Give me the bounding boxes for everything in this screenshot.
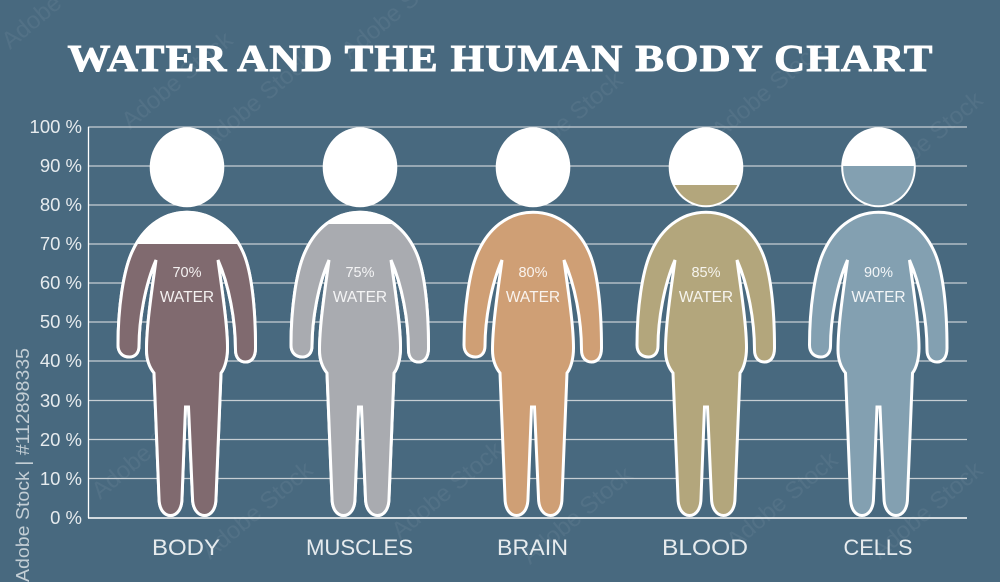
x-axis labels: MUSCLES xyxy=(306,535,413,560)
y-axis labels: 0 % xyxy=(50,507,82,528)
watermarks: Adobe Stock xyxy=(507,66,629,175)
side credit text: Adobe Stock | #112898335 xyxy=(13,348,33,582)
x-axis labels: CELLS xyxy=(844,535,912,560)
figure: body 70%: WATER xyxy=(160,289,214,306)
figure: brain 80%: WATER xyxy=(506,289,560,306)
watermarks: Adobe Stock xyxy=(867,86,989,195)
figure: muscles 75%: 75% xyxy=(345,265,375,281)
figure: blood 85%: WATER xyxy=(679,289,733,306)
figure: blood 85% xyxy=(637,127,774,516)
figure: body 70% xyxy=(118,127,256,516)
y-axis labels: 50 % xyxy=(40,311,82,332)
y-axis labels: 70 % xyxy=(40,233,82,254)
figure: body 70%: 70% xyxy=(172,265,202,281)
watermarks: Adobe Stock xyxy=(517,461,639,570)
x-axis labels: BRAIN xyxy=(497,535,568,560)
y-axis labels: 90 % xyxy=(40,155,82,176)
y-axis labels: 100 % xyxy=(30,116,82,137)
figure: cells 90%: 90% xyxy=(864,265,893,281)
title: WATER AND THE HUMAN BODY CHART xyxy=(68,38,933,80)
chart grid and axes xyxy=(88,127,967,518)
figure: cells 90% xyxy=(810,127,947,516)
watermarks: Adobe Stock xyxy=(197,456,319,565)
watermarks: Adobe Stock xyxy=(87,396,209,505)
y-axis labels: 20 % xyxy=(40,429,82,450)
watermarks: Adobe Stock xyxy=(707,36,829,145)
y-axis labels: 60 % xyxy=(40,272,82,293)
figure: brain 80% xyxy=(464,127,602,516)
y-axis labels: 30 % xyxy=(40,390,82,411)
figure: brain 80%: 80% xyxy=(518,265,548,281)
figure: muscles 75%: WATER xyxy=(333,289,387,306)
figure: blood 85%: 85% xyxy=(691,265,721,281)
watermarks: Adobe Stock xyxy=(722,446,844,555)
watermarks: Adobe Stock xyxy=(387,436,509,545)
figure: cells 90%: WATER xyxy=(851,289,906,306)
y-axis labels: 80 % xyxy=(40,194,82,215)
watermarks: Adobe Stock xyxy=(197,46,319,155)
y-axis labels: 40 % xyxy=(40,350,82,371)
x-axis labels: BODY xyxy=(152,535,220,560)
watermarks: Adobe Stock xyxy=(867,456,989,565)
y-axis labels xyxy=(30,116,82,528)
x-axis labels xyxy=(152,535,912,560)
y-axis labels: 10 % xyxy=(40,468,82,489)
x-axis labels: BLOOD xyxy=(662,535,748,560)
watermarks: Adobe Stock xyxy=(117,26,239,135)
figure: muscles 75% xyxy=(291,127,428,516)
